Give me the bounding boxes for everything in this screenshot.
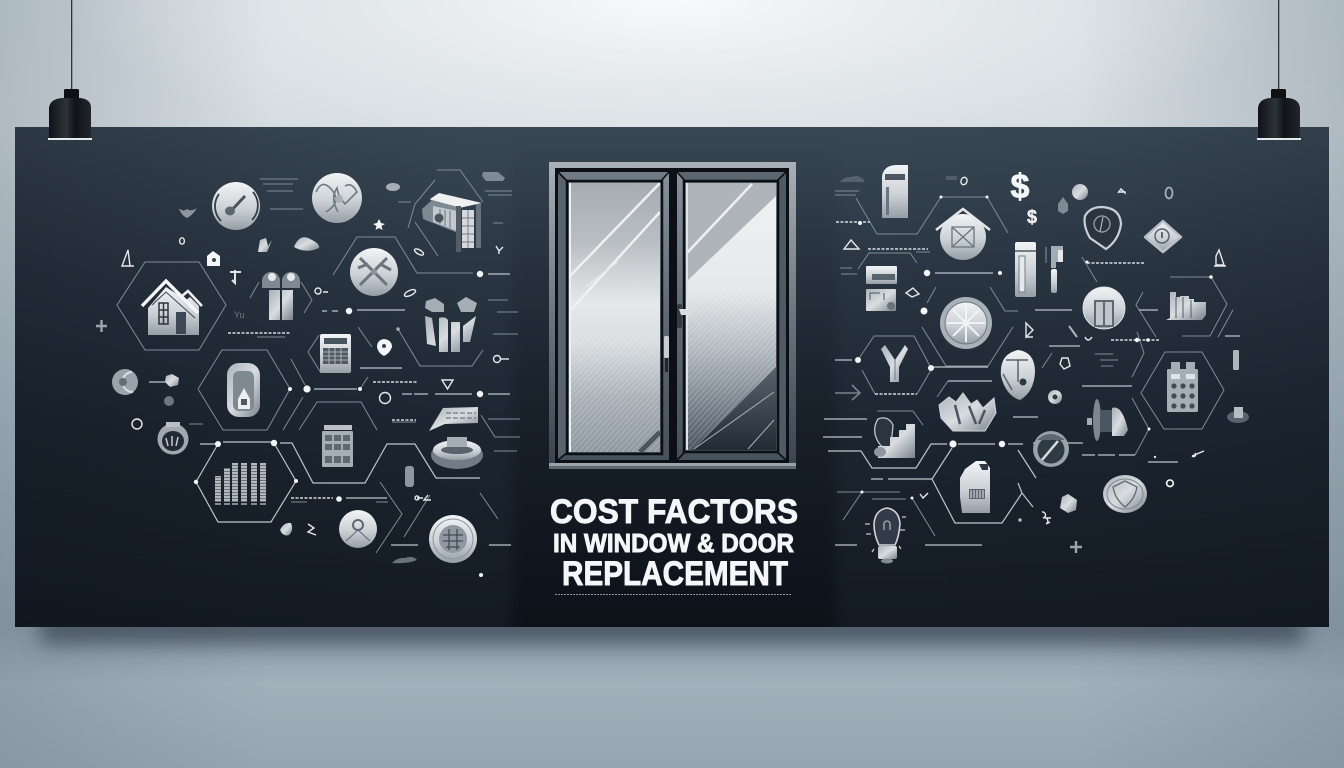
icon: house medallion (936, 209, 990, 260)
icon: speaker bellows (1087, 399, 1128, 441)
icon: tool (1046, 246, 1063, 293)
bar chart icon (214, 462, 267, 505)
icon: dollar sign small: $ (1027, 207, 1037, 227)
icon: dollar sign large: $ (1011, 168, 1030, 206)
icon: plus, left (96, 320, 107, 332)
icon: boxes (866, 266, 897, 311)
icon: ornate medallion (312, 173, 362, 223)
title line 1: COST FACTORS (550, 493, 798, 531)
right glass pane (686, 183, 776, 450)
left sash (558, 172, 669, 460)
small glyph icons, left (122, 172, 509, 563)
icon: door medallion (1083, 287, 1125, 329)
icon: heart shield (1085, 207, 1121, 249)
icon: sensor medallion (339, 510, 377, 548)
right sash (677, 172, 786, 460)
panel shadow (40, 612, 1304, 644)
icon: keyboard panel (429, 407, 478, 431)
icon: elevator badge (227, 363, 260, 417)
icon: lock shield (1001, 350, 1035, 400)
window latch, left (664, 336, 669, 372)
icon: spoked wheel (940, 297, 992, 349)
icon: zipper Y (881, 345, 908, 382)
icon: keypad remote (1167, 362, 1198, 412)
connector nodes (194, 271, 483, 577)
icon: crown crystal (939, 393, 996, 431)
connector network, right (823, 191, 1240, 545)
icon: guitar medallion (212, 182, 260, 230)
icon: gauge dial (1033, 431, 1069, 467)
centre mullion (672, 168, 674, 463)
icon: factory bars (1166, 292, 1206, 320)
icon: earbuds tools (262, 272, 300, 320)
icon: gauge (158, 422, 188, 454)
right cluster of cost factor icons (823, 165, 1249, 564)
window sill (549, 463, 796, 469)
icon: dish (431, 437, 483, 469)
icon: lock diamond (1145, 221, 1181, 252)
title (550, 493, 798, 593)
icon: brushes and bottles (425, 297, 477, 352)
window outer frame (549, 162, 796, 465)
icon: garage door (422, 193, 482, 252)
icon: cylinder door (1015, 242, 1036, 297)
icon: house (142, 281, 202, 335)
left glass pane (569, 183, 660, 452)
right hanging lamp (1257, 0, 1301, 140)
icon: jug with barcode (960, 461, 990, 513)
window handle, right (677, 304, 694, 328)
icon: payment terminal (882, 165, 908, 218)
connector nodes (855, 196, 1213, 522)
left cluster of cost factor icons (96, 170, 520, 577)
icon: circuit coin (429, 515, 477, 563)
icon: swirl shell (112, 369, 138, 395)
icon: calculator (320, 334, 351, 373)
icon: large oval shield (1103, 475, 1147, 513)
small glyph icons, left: Yu (234, 310, 245, 320)
icon: calculator keypad (322, 425, 353, 467)
title line 2: IN WINDOW & DOOR (553, 530, 794, 558)
title line 3: REPLACEMENT (562, 555, 788, 593)
icon: compass medallion (350, 248, 398, 296)
left hanging lamp (48, 0, 92, 140)
icon: bulb with bars (874, 418, 915, 458)
icon: plus, right (1070, 541, 1082, 553)
icon: light bulb (865, 508, 906, 564)
connector network, left (117, 170, 520, 577)
title underline (555, 594, 792, 596)
central window (549, 162, 796, 469)
small glyph icons, right (835, 176, 1249, 524)
dark banner panel (15, 127, 1329, 627)
